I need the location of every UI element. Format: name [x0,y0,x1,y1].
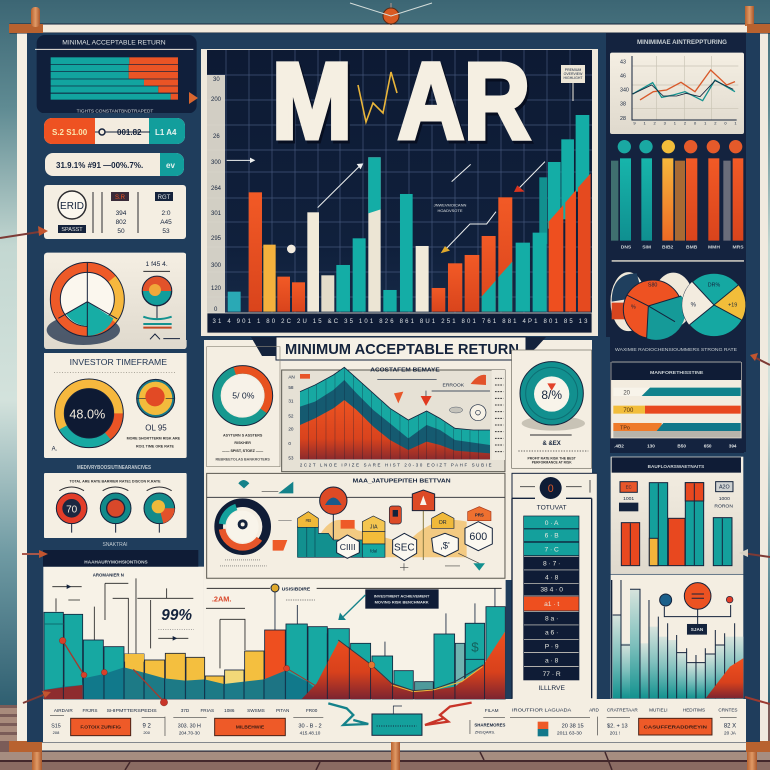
panel: dark backdrop [606,33,746,453]
bottom strip: labels and buttons: 37D [181,708,190,713]
bottom panel: bar chart: INVESTMENT ACHIEVEMENT [374,593,430,598]
arrow: left upper [0,226,48,238]
bottom panel: bar chart [42,550,506,706]
teal ribbon icon [328,703,368,725]
bottom strip: labels and buttons: S15 [51,723,61,729]
bottom strip: right side: 20 38 15 [562,724,584,730]
y axis strip: 300 [211,263,222,269]
panel: horizontal stripes: 20 [623,391,631,397]
card: donut and small gauge: 1 f45 4. [146,261,168,268]
panel: horizontal stripes: MANFORETHISSTINE [650,370,703,375]
card: donut and small gauge [44,253,187,349]
line chart card [610,53,744,134]
title: MAR: AR [398,40,530,161]
heading: minimum adjustment: MINIMIMAE AINTREPPTURING [637,40,727,46]
bottom strip: right side: CRNTES [718,708,738,713]
sub-panel: donut gauge: ASYTURN S ASSTERS [223,434,263,438]
card: button and columns [44,185,186,239]
x axis strip: 31 4 901 1 80 2C 2U 15 &C 35 101 826 861 8U1 251 801 761 881 4P1 801 85 13 [212,319,588,325]
arrow: left bottom mid [22,550,48,558]
card: investor timeframe: A. [52,447,58,453]
card: investor timeframe: MORE SHORTTERM RISK ARE [127,436,181,440]
y axis strip: 301 [211,211,222,217]
stripe labels: 394 [729,443,737,448]
bottom strip: labels and buttons: 303. 30 H [178,723,201,729]
sub-panel: hexagon flow chart: CIIII [340,542,356,552]
bottom panel: lower strip [43,699,746,742]
stripe labels: 130 [647,443,655,448]
line chart card: 46 [620,74,626,80]
button [215,718,285,736]
wooden floor [0,705,770,770]
y axis strip: 30 [213,77,220,83]
bottom strip: labels and buttons: ZNSQARS. [475,730,495,735]
caption: TIGHTS CONSTANTBNDTRAPEDT [77,109,153,115]
note tag: OVERVIEW [564,72,583,76]
frame: bottom rail [9,736,770,770]
sub-panel: donut gauge: —— SPIST, STOEZ —— [222,449,263,453]
panel: horizontal stripes: TPo [620,425,630,431]
area chart: 52 [288,413,294,418]
note tag: HIGHLIGHT [563,76,583,80]
card: investor timeframe: OL 95 [145,424,167,433]
y axis strip: 264 [211,186,222,192]
bottom strip: right side: $2. + 13 [607,723,628,729]
bottom strip: labels and buttons: FILAM [485,708,499,713]
vertical bars with icons: SIM [642,244,651,250]
table rows: 4 · 8 [545,574,559,581]
caption: WAXIMIE RADIOCHENSIOUMMERS STRONG RATE [615,347,737,353]
vertical bars with icons: MMH [708,244,720,250]
card: investor timeframe [44,352,187,458]
bottom strip: labels and buttons: FR00 [306,708,318,713]
bottom strip: labels and buttons: 208 [53,730,60,735]
area chart: ERROOK [443,383,465,389]
stripe labels: .4B2 [614,443,624,448]
heading: investor timeframe: INVESTOR TIMEFRAME [70,358,167,367]
card: button and columns: S.R [115,195,126,201]
sub-panel: teal gauge: & &EX [543,441,561,447]
bottom strip: labels and buttons: PITAN [276,708,289,713]
line chart card: 9 1 2 3 1 2 0 1 2 0 1 [633,120,737,125]
card: button and columns: 2:0 [161,210,171,217]
main chart panel [201,40,598,336]
right column [606,33,746,453]
sub-panel: hexagon flow chart: JIA [370,524,378,530]
panel: gradient bars with pins [611,575,743,699]
sub-panel: hexagon flow chart: MAA_JATUPEPITEH BETTVAN [353,479,451,485]
panel: column chart: 1000 [719,496,730,502]
vertical bars with icons: DNS [621,244,632,250]
bottom strip: labels and buttons: FRJRS [82,708,97,713]
vertical bars with icons: BMB [686,244,698,250]
bar chart [227,115,591,312]
pill: orange and teal scale: L1 A4 [155,128,177,137]
bottom strip: labels and buttons: 1086 [224,708,235,713]
bar chart: HOADVSOTE [437,208,463,213]
caption: lower left: SNAKTRAI [102,542,128,548]
sub-panel: hexagon flow chart: 600 [469,531,487,543]
table rows: 38 4 · 0 [540,587,563,594]
bottom strip: right side: 2011 63-30 [557,731,582,737]
card: three gauges [44,473,187,539]
table rows: 6 · B [545,533,559,540]
bottom strip: right side: 201 ! [610,731,620,736]
bottom strip: labels and buttons: SHAREMORES [474,723,506,728]
sub-panel: teal gauge: PROFIT RATE RISK THE BEST [528,456,576,460]
table rows: 0 · A [545,520,559,527]
pill: orange and teal scale: S.2 S1.00 [52,128,88,137]
card: button and columns: 53 [162,228,170,235]
bottom panel: bar chart: HAAHAURYMOHSIONTIONS [84,560,148,565]
card: investor timeframe: ROI1 TIME ORE RATE [136,444,175,448]
bottom strip: right side [510,708,738,737]
sub-panel: teal gauge: PERFORMANCE AT RISK [532,460,572,464]
stepped bars [298,527,363,557]
card: button and columns: A45 [160,219,172,226]
arrows on the frame [0,226,770,704]
panel: column chart [611,457,743,574]
heading: minimal acceptable return: MINIMAL ACCEPTABLE RETURN [62,40,166,46]
bottom strip: right side: 82 X [724,724,736,730]
panel: column chart: RORON [714,503,733,509]
panel: totals table: TOTUVAT [537,504,567,511]
area chart: 58 [288,385,294,390]
pill: cream and teal scale: 31.9.1% #91 —00%.7%. [56,161,143,170]
line chart card: 43 [620,59,626,65]
y axis strip: 295 [211,236,222,242]
line chart card: 38 [620,102,626,108]
bottom strip: labels and buttons: MILBEHWIE [236,725,265,731]
panel: totals table: ILLLRVE [538,685,565,692]
bottom strip: right side: CASUFFERADDREYIN [644,725,707,731]
area chart: ACOSTAFEM BEMAYE [370,368,440,374]
y axis strip: 200 [211,97,222,103]
donut [219,503,267,551]
table rows: a 6 · [545,630,558,637]
bottom panel: bar chart: 99% [161,607,192,624]
bottom panel: bar chart: $ [471,640,479,655]
bottom strip: right side: ARD [589,708,600,713]
bottom strip: labels and buttons: 30 - B - 2 [298,723,322,729]
y axis strip: 26 [213,134,220,140]
pie charts: DR% [708,283,720,289]
pie charts: +19 [728,303,737,309]
panel: gradient bars with pins: SJAN [691,627,704,632]
bottom strip: labels and buttons: 204.70-30 [179,730,200,735]
chart grid [207,50,592,313]
bottom strip: labels and buttons: 200 [143,730,151,735]
yellow hills [313,520,467,557]
panel: column chart: 1001 [623,496,634,502]
table rows: 7 · C [544,547,559,554]
pill: cream and teal scale [45,153,184,176]
table rows: P · 9 [545,643,559,650]
caption: mid left: MEDIVRYBOOSIUTINEARANCIVES [77,465,151,471]
bar chart: JNWEVMOICANN [434,203,466,208]
card: investor timeframe: 48.0% [69,408,105,422]
bottom strip: labels and buttons: FRIAS [200,708,214,713]
banner: minimum acceptable return: MINIMUM ACCEPTABLE RETURN [285,341,519,358]
icon: orange arrow head [189,92,198,104]
area chart: 31 [288,398,294,403]
card: button and columns: 50 [117,228,125,235]
bottom strip: right side: HEDITIMS [683,708,705,713]
sub-panel: hexagon flow chart: PRS [475,513,484,518]
title: MAR: M [274,43,354,164]
sub-panel: donut gauge: REBREETOLAS BANKROTERS [215,458,270,462]
vertical bars with icons [611,140,744,261]
table rows: 77 · R [543,671,561,678]
panel: totals table [512,473,597,700]
bottom panel: bar chart: MOVING RISK BENCHMARK [375,599,429,604]
axis side ticks [492,370,505,460]
table rows: 8 · 7 · [543,560,560,567]
arrow: right mid [739,549,770,557]
note tag [561,65,585,101]
area chart: 20 [288,427,294,432]
pie charts [610,272,746,340]
bottom strip: labels and buttons: AIRDAIR [54,708,73,713]
panel: column chart: BAUFLOARSWAETNAITS [648,464,704,469]
bottom strip: labels and buttons: 415.48.10 [300,730,321,735]
pill: orange and teal scale [44,118,185,144]
table rows: a1 · t [544,601,559,608]
x axis strip [207,313,592,333]
area chart [282,367,505,472]
trend markers [63,641,84,675]
title: MAR: AR [400,43,532,164]
teal sign [372,714,422,735]
bottom strip: right side: CRATRETAAR [607,708,638,713]
y axis strip [207,75,225,313]
sub-panel: teal gauge [512,350,592,468]
sub-panel: hexagon flow chart: fdal [370,548,377,553]
bottom strip: right side: MUTIELI [649,708,668,713]
stripe labels: 650 [704,443,712,448]
y axis strip: 0 [214,307,218,313]
vertical bars with icons: MRS [732,244,744,250]
header [42,550,198,567]
pie charts: S80 [648,283,657,289]
arrow: left lower [23,691,51,703]
table rows: 8 a · [545,616,558,623]
bottom strip: labels and buttons: SWSMS [247,708,265,713]
card: button and columns: 394 [116,210,127,217]
stripe labels [614,443,737,448]
bottom strip: right side: 20 JA [724,731,737,736]
table rows: a · 8 [545,658,559,665]
bottom strip: labels and buttons: 9 2 [142,723,151,729]
sub-panel: donut gauge [207,347,280,467]
panel: column chart: A2O [719,485,730,491]
card: button and columns: 802 [116,219,127,226]
sub-panel: teal gauge: 8/% [541,388,562,402]
sub-panel: hexagon flow chart: ,$' [440,540,450,550]
vertical bars with icons: BIB2 [662,244,674,250]
area chart: AN [288,374,295,379]
area chart: 2C2T LNOE IPIZE SARE HIST 20-30 EOIZT PAHF SUBIE [300,463,492,468]
note tag: PREMIUM [565,68,581,72]
header [612,457,741,473]
arrows [227,160,545,252]
frame: top rail [9,3,770,33]
left column [34,35,198,539]
sub-panel: hexagon flow chart: OR [439,520,447,526]
bottom strip: labels and buttons: F.OTOIX ZURIFIG [80,725,121,731]
button [639,718,712,735]
panel: stacked horizontal bars [34,35,197,115]
pill: orange and teal scale: 001.82 [117,128,142,137]
arrow: right top [750,353,770,365]
sub-panel: donut gauge: RISKHER [234,441,251,445]
pie charts: % [691,303,697,309]
lower teal layer [44,667,317,699]
arrow: right low [745,697,770,704]
card: three gauges: TOTAL ARE RATE BARRIER RATE1 DISCON R.RATE [69,479,161,483]
area chart: 53 [288,455,294,460]
pin [332,513,335,540]
panel: column chart: EC [626,484,632,489]
panel: middle report [204,337,592,580]
sub-panel: hexagon flow chart: SEC [394,543,415,554]
title: MAR: M [272,40,352,161]
small gauge [142,276,172,306]
card: three gauges: 70 [66,504,78,515]
hexagons [337,522,492,561]
panel: horizontal stripes [611,362,742,448]
header [612,363,741,380]
y axis strip: 120 [211,286,222,292]
bars [44,607,505,699]
annotations: AROMANIER N [93,572,124,577]
card: button and columns: SPASST [61,227,83,233]
bottom strip: right side: IROUTFIOR LAGUADA [512,708,572,714]
card: button and columns: RGT [158,195,171,201]
panel: horizontal stripes: 700 [623,408,634,414]
button [71,718,131,736]
sub-panel: hexagon flow chart [207,473,505,578]
line chart card: 28 [620,116,626,122]
card: button and columns: ERID [60,201,84,212]
sub-panel: donut gauge: 5/ 0% [232,390,255,400]
orange wave [302,632,505,699]
bottom panel: bar chart: .2AM. [212,595,231,604]
small gauge [137,379,175,417]
sub-panel: hexagon flow chart: #B [305,518,311,523]
pie charts: % [631,304,636,310]
frame: left white post [17,33,27,741]
bottom strip: labels and buttons: SHIPMTTERSPEDIS [107,708,157,713]
bottom strip: labels and buttons [50,703,506,736]
red ribbon icon [425,703,472,725]
pill: cream and teal scale: ev [166,161,175,170]
stripe labels: B50 [677,443,686,448]
callout [365,589,439,609]
panel: totals table: 0 [548,483,554,495]
frame: right white post [760,33,768,741]
table rows [523,516,579,680]
title: MAR [272,40,532,164]
bottom panel: bar chart: USISIBDIRE [282,586,311,592]
area chart: 0 [288,441,291,446]
banner: minimum acceptable return [251,337,546,360]
line chart card: 340 [620,87,629,93]
icon: yellow spark line [358,72,397,122]
y axis strip: 300 [211,160,222,166]
